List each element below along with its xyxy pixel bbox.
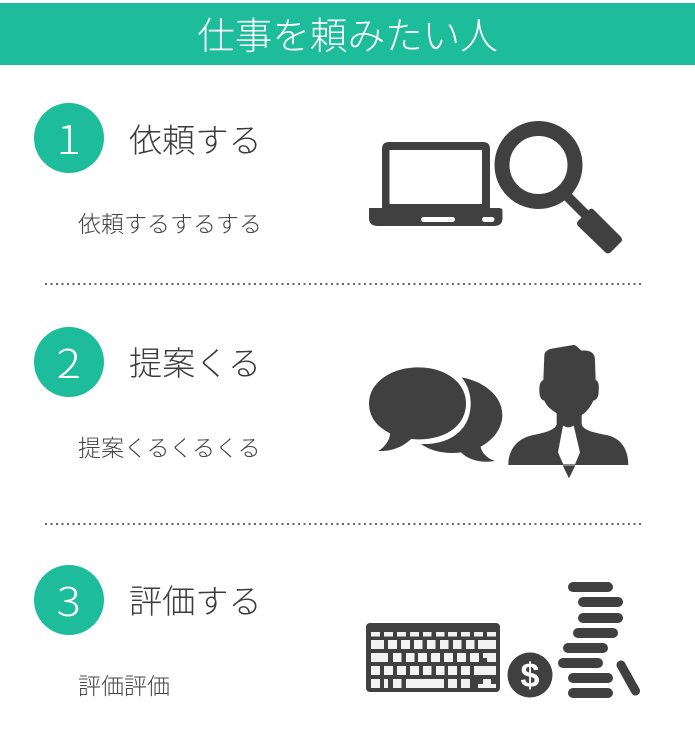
step 2 number badge	[34, 327, 104, 397]
divider 1	[45, 283, 642, 285]
step 1 number badge	[34, 103, 104, 173]
step 3 number badge: 3	[57, 570, 81, 628]
step 1 description: 依頼するするする	[78, 211, 262, 237]
icon: magnifying glass	[502, 128, 622, 254]
step 1 number badge: 1	[57, 108, 81, 166]
header band	[0, 3, 695, 65]
icon: speech bubbles	[369, 367, 502, 462]
icon: laptop	[369, 142, 502, 226]
icon: dollar coin	[508, 652, 552, 698]
step 2 number badge: 2	[57, 332, 81, 390]
icon: dollar coin: $	[521, 657, 540, 695]
icon: businessman	[508, 345, 628, 478]
step 2 heading: 提案くる	[129, 346, 261, 383]
icon: keyboard	[366, 623, 500, 692]
icon: coin stack	[558, 582, 636, 698]
divider 2	[45, 523, 642, 525]
step 3 description: 評価評価	[78, 673, 170, 699]
title: 仕事を頼みたい人	[197, 15, 498, 57]
step 3 heading: 評価する	[129, 584, 262, 621]
step 2 description: 提案くるくるくる	[78, 435, 261, 461]
step 3 number badge	[34, 565, 104, 635]
step 1 heading: 依頼する	[129, 123, 262, 160]
